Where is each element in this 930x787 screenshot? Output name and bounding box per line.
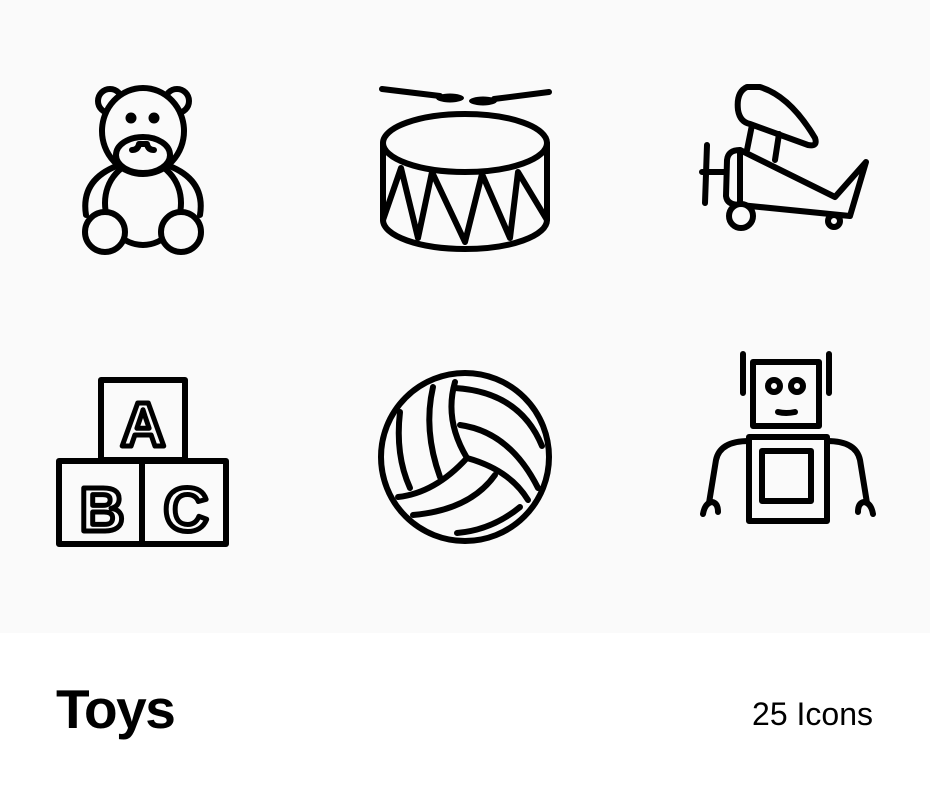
icon: teddy bear (85, 88, 201, 252)
icon: airplane (702, 87, 866, 228)
icon count: 25 Icons (752, 696, 873, 732)
icon: robot (703, 354, 873, 521)
icon: ABC blocks: A (121, 391, 165, 460)
icon: ABC blocks: C (164, 476, 208, 545)
icon: volleyball (381, 373, 549, 541)
icon: drum (382, 89, 549, 249)
icon: ABC blocks: B (80, 476, 124, 545)
title: Toys (56, 678, 174, 740)
icon: ABC blocks (59, 380, 226, 545)
